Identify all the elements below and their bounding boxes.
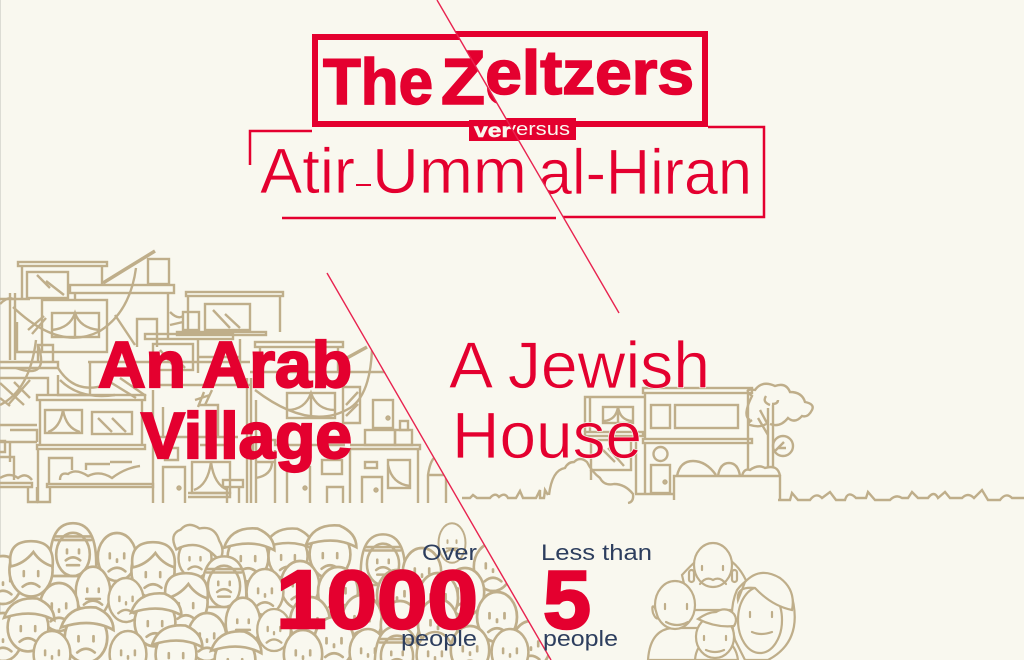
divider: lower diagonal	[327, 273, 551, 660]
heading: a jewish house: A Jewish	[449, 328, 710, 402]
divider: upper diagonal	[437, 0, 619, 313]
heading: a jewish house	[449, 328, 710, 472]
stat: less than 5 people	[541, 540, 652, 651]
heading: an arab village	[98, 328, 352, 472]
illustration: small jewish family	[648, 543, 795, 660]
headline frame: atir-umm, left half: Umm	[372, 135, 527, 207]
headline frame: atir-umm, left half: Atir	[260, 135, 355, 207]
illustration: jewish house	[462, 384, 1024, 503]
headline frame: atir-umm, left half	[250, 131, 556, 218]
headline frame: al-hiran, right half: al-Hiran	[538, 136, 752, 208]
left edge rule	[0, 0, 1, 660]
stat: less than 5 people: Less than	[541, 540, 652, 565]
heading: an arab village: Village	[141, 399, 352, 472]
headline frame: the zeltzers, right half	[456, 31, 708, 140]
headline frame: the zeltzers, left half: The	[323, 45, 433, 118]
stat: over 1000 people: 1000	[276, 553, 478, 646]
headline frame: the zeltzers, right half: versus	[505, 119, 570, 139]
headline frame: the zeltzers, right half: Zeltzers	[445, 39, 694, 108]
headline frame: the zeltzers, left half	[312, 34, 518, 141]
stat: over 1000 people: people	[401, 626, 477, 651]
stat: less than 5 people: 5	[543, 553, 591, 646]
illustration: crowd of sad villagers	[0, 523, 550, 660]
heading: an arab village: An Arab	[98, 328, 352, 401]
headline frame: the zeltzers, left half: ver	[474, 121, 512, 142]
headline frame: the zeltzers, left half: Ze	[441, 45, 525, 118]
stat: less than 5 people: people	[543, 626, 618, 651]
stat: over 1000 people: Over	[422, 540, 477, 565]
heading: a jewish house: House	[452, 398, 642, 472]
illustration: arab village	[0, 251, 446, 503]
